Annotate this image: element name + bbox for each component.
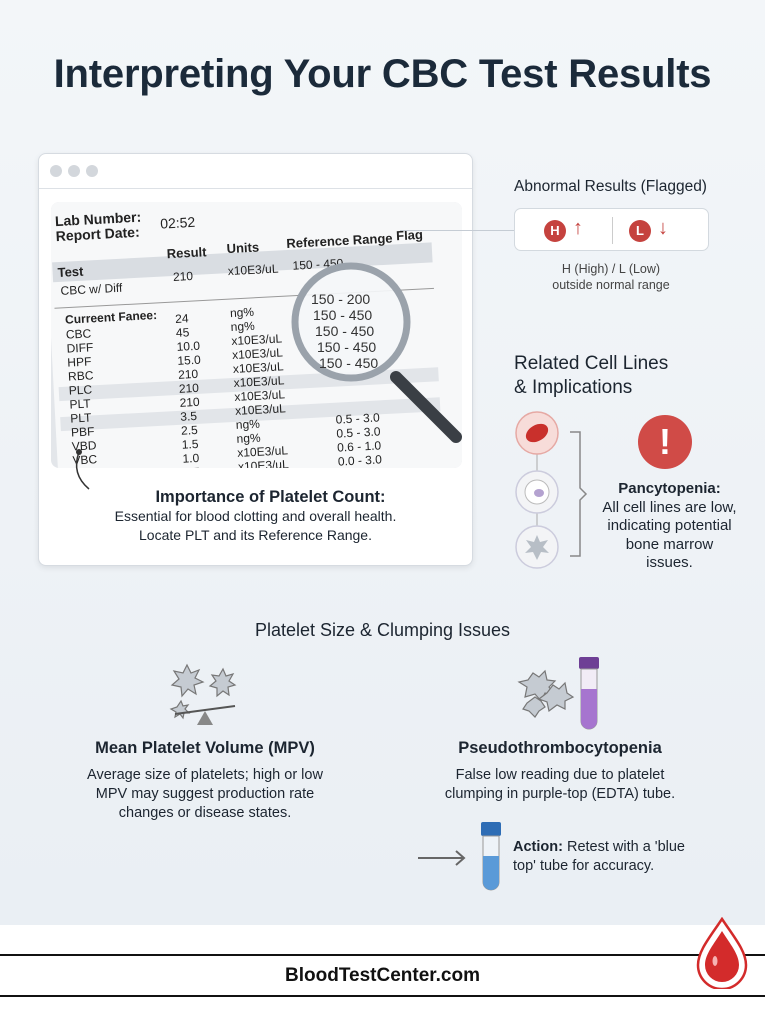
flag box: ↓: [658, 217, 668, 239]
text block: MPV: Mean Platelet Volume (MPV): [95, 739, 315, 757]
lab report image: 150 - 450: [319, 355, 378, 371]
lab report image: ng%: [230, 319, 255, 334]
lab report image: 0.5 - 3.0: [335, 410, 380, 427]
text: pancytopenia: Pancytopenia:: [618, 480, 721, 497]
icon: MPV platelets scale: [170, 664, 236, 725]
text block: MPV: [87, 739, 323, 821]
text: action: [513, 839, 685, 874]
text block: pseudothrombocytopenia: [445, 739, 675, 802]
text: importance of platelet count: Essential for blood clotting and overall health.: [115, 508, 396, 524]
lab report image: x10E3/uL: [231, 331, 283, 348]
heading: platelet size: Platelet Size & Clumping Issues: [255, 620, 510, 640]
lab report image: Report Date:: [55, 224, 140, 244]
heading: related cell lines: [514, 353, 668, 398]
icon: alert: [638, 415, 692, 469]
lab report image: x10E3/uL: [234, 387, 286, 404]
panel: lab report: [38, 153, 473, 566]
heading: related cell lines: & Implications: [514, 377, 632, 398]
lab report image: x10E3/uL: [235, 401, 286, 418]
lab report image: [51, 202, 462, 468]
text: action: top' tube for accuracy.: [513, 858, 654, 874]
lab report image: 150 - 450: [292, 256, 344, 273]
lab report image: 210: [178, 367, 199, 382]
icon: alert: !: [659, 421, 671, 462]
footer: [0, 925, 765, 1024]
lab report image: Reference Range: [286, 230, 393, 251]
lab report image: x10E3/uL: [233, 359, 284, 376]
lab report image: x10E3/uL: [227, 261, 279, 278]
lab report image: Units: [226, 239, 259, 256]
icon: clumped platelets and purple tube: [518, 657, 599, 730]
lab report image: Flag: [396, 227, 423, 243]
lab report image: 150 - 200: [311, 291, 370, 307]
icon: L low: L: [636, 223, 644, 238]
lab report image: Curreent Fanee:: [65, 308, 157, 327]
lab report image: 1.5: [181, 437, 199, 452]
cell line icons: [515, 411, 587, 569]
title: Interpreting Your CBC Test Results: [54, 52, 711, 96]
text block: MPV: changes or disease states.: [119, 805, 291, 821]
text block: pseudothrombocytopenia: False low reading due to platelet: [456, 767, 664, 783]
text: pancytopenia: issues.: [646, 554, 693, 571]
lab report image: CBC w/ Diff: [60, 281, 123, 298]
lab report image: 2.5: [181, 423, 198, 438]
text: pancytopenia: bone marrow: [626, 536, 713, 553]
lab report image: DIFF: [66, 340, 94, 356]
connector line to flags: [400, 230, 514, 231]
lab report image: 210: [179, 395, 200, 410]
lab report image: x10E3/uL: [237, 443, 289, 460]
lab report image: 210: [179, 381, 200, 396]
heading: abnormal results: Abnormal Results (Flagged): [514, 178, 707, 195]
text block: pseudothrombocytopenia: Pseudothrombocytopenia: [458, 739, 662, 757]
lab report image: 02:52: [160, 214, 196, 232]
text: pancytopenia: [602, 480, 737, 571]
flag caption: outside normal range: [552, 278, 670, 292]
icon: blood drop logo: [696, 917, 748, 989]
lab report image: x10E3/uL: [233, 373, 285, 390]
connector dot and curve: [76, 449, 90, 490]
text: importance of platelet count: [115, 488, 396, 543]
lab report image: PLC: [68, 382, 93, 398]
icon: H high: [544, 220, 566, 242]
text: importance of platelet count: Locate PLT and its Reference Range.: [139, 527, 372, 543]
lab report image: 0.6 - 1.0: [337, 438, 382, 455]
text block: MPV: Average size of platelets; high or low: [87, 767, 323, 783]
lab report image: ng%: [236, 431, 261, 446]
lab report image: 45: [176, 325, 190, 340]
text block: pseudothrombocytopenia: clumping in purple-top (EDTA) tube.: [445, 786, 675, 802]
lab report image: 15.0: [177, 353, 201, 368]
text: action: Action: Retest with a 'blue: [513, 839, 685, 855]
lab report image: Result: [166, 244, 208, 261]
lab report image: 1.0: [182, 451, 200, 466]
flag caption: [552, 262, 670, 292]
lab report image: HPF: [67, 354, 92, 370]
magnifier: [396, 377, 456, 437]
lab report image: 150 - 450: [315, 323, 374, 339]
text: importance of platelet count: Importance of Platelet Count:: [155, 488, 386, 506]
heading: related cell lines: Related Cell Lines: [514, 353, 668, 374]
icon: L low: [629, 220, 651, 242]
text block: MPV: MPV may suggest production rate: [96, 786, 314, 802]
lab report image: 150 - 450: [313, 307, 372, 323]
lab report image: 24: [175, 311, 189, 326]
lab report image: Lab Number:: [55, 209, 142, 229]
flag box: ↑: [573, 217, 583, 239]
lab report image: 150 - 450: [317, 339, 376, 355]
text: pancytopenia: indicating potential: [607, 517, 732, 534]
lab report image: RBC: [68, 368, 94, 384]
lab report image: x10E3/uL: [232, 345, 284, 362]
flag box: [514, 208, 709, 251]
lab report image: VBD: [71, 438, 97, 454]
arrow: [418, 850, 466, 866]
lab report image: VBC: [72, 452, 98, 468]
lab report image: 210: [173, 269, 194, 284]
lab report image: PLT: [70, 410, 92, 426]
text: pancytopenia: All cell lines are low,: [602, 499, 737, 516]
lab report image: PBF: [71, 424, 95, 440]
lab report image: ng%: [235, 417, 261, 432]
lab report image: 3.5: [180, 409, 198, 424]
window dots: [50, 165, 98, 177]
icon: blue top tube: [481, 822, 501, 890]
lab report image: 0.5 - 3.0: [336, 424, 381, 441]
lab report image: PLT: [69, 396, 92, 412]
footer brand text: BloodTestCenter.com: [285, 965, 480, 986]
lab report image: CBC: [66, 326, 92, 342]
lab report image: 10.0: [176, 339, 201, 354]
lab report image: ng%: [230, 305, 255, 320]
icon: H high: H: [550, 223, 560, 238]
lab report image: Test: [57, 264, 84, 280]
flag caption: H (High) / L (Low): [562, 262, 660, 276]
